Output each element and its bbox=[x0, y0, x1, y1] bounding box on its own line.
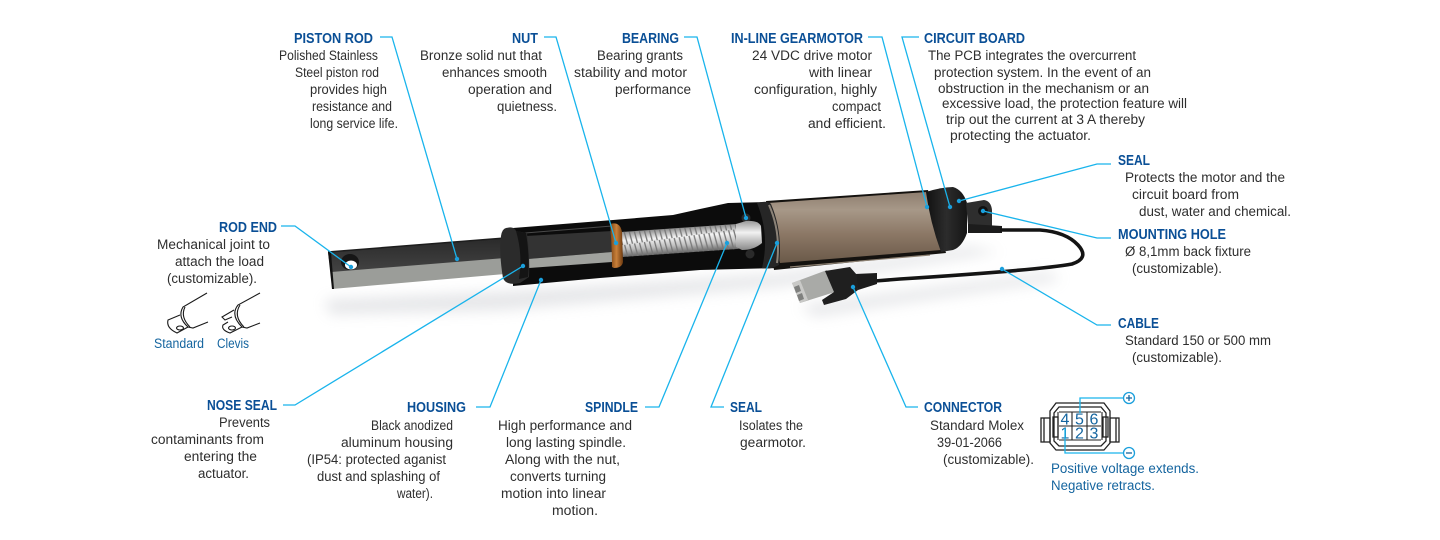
connector label: CONNECTOR bbox=[924, 400, 1002, 416]
rod end label: (customizable). bbox=[167, 271, 257, 286]
nose seal label: NOSE SEAL bbox=[207, 398, 277, 414]
rod end label: attach the load bbox=[175, 254, 264, 269]
rod end label bbox=[157, 220, 353, 286]
housing label bbox=[307, 278, 543, 501]
in-line gearmotor label bbox=[731, 31, 929, 209]
icon: clevis rod end bbox=[217, 293, 260, 351]
housing label: aluminum housing bbox=[341, 435, 453, 450]
bearing label: stability and motor bbox=[574, 65, 688, 80]
pin numbers: 6 bbox=[1090, 412, 1099, 428]
rod end label: Mechanical joint to bbox=[157, 237, 270, 252]
circuit board label: The PCB integrates the overcurrent bbox=[928, 48, 1136, 63]
bearing bbox=[736, 214, 762, 258]
polarity note bbox=[1051, 461, 1199, 493]
motor seal label: SEAL bbox=[730, 400, 762, 416]
housing bbox=[513, 202, 780, 286]
nose seal label: actuator. bbox=[198, 466, 249, 481]
motor seal flange bbox=[757, 202, 780, 269]
nose seal label: contaminants from bbox=[151, 432, 264, 447]
piston rod label: provides high bbox=[310, 82, 387, 97]
spindle label bbox=[498, 241, 729, 518]
piston rod label: Steel piston rod bbox=[295, 65, 379, 80]
motor seal label: Isolates the bbox=[739, 418, 803, 433]
pin numbers: 4 bbox=[1061, 412, 1070, 428]
connector pinout diagram bbox=[1041, 392, 1199, 493]
motor seal label bbox=[711, 241, 806, 450]
polarity note: Negative retracts. bbox=[1051, 478, 1155, 493]
spindle label: High performance and bbox=[498, 418, 632, 433]
motor seal label: gearmotor. bbox=[740, 435, 806, 450]
mounting hole label: (customizable). bbox=[1132, 261, 1222, 276]
cable label bbox=[1000, 267, 1271, 365]
rod end hole bbox=[341, 254, 359, 270]
positive lead bbox=[1080, 392, 1134, 413]
circuit board label: protection system. In the event of an bbox=[934, 65, 1151, 80]
actuator illustration bbox=[325, 187, 1083, 316]
gearmotor body bbox=[768, 192, 941, 263]
mounting ear bbox=[966, 200, 992, 227]
piston rod label: PISTON ROD bbox=[294, 31, 373, 47]
connector outline bbox=[1041, 403, 1119, 450]
in-line gearmotor label: compact bbox=[832, 99, 881, 114]
nut label bbox=[420, 31, 618, 245]
connector label: Standard Molex bbox=[930, 418, 1024, 433]
mounting hole label bbox=[981, 209, 1251, 276]
connector label: 39-01-2066 bbox=[937, 435, 1002, 450]
spindle label: Along with the nut, bbox=[505, 452, 620, 467]
negative lead bbox=[1065, 428, 1134, 458]
bearing label: performance bbox=[615, 82, 691, 97]
nut label: enhances smooth bbox=[442, 65, 547, 80]
circuit board label: trip out the current at 3 A thereby bbox=[946, 112, 1145, 127]
circuit board label bbox=[902, 31, 1187, 209]
bearing label: Bearing grants bbox=[597, 48, 683, 63]
housing label: water). bbox=[396, 486, 433, 501]
nose seal bbox=[500, 227, 529, 284]
top seal label: circuit board from bbox=[1132, 187, 1239, 202]
ground shadow bbox=[325, 247, 1060, 316]
piston rod label: resistance and bbox=[312, 99, 392, 114]
motor frame backing bbox=[766, 190, 946, 270]
nose seal label: Prevents bbox=[219, 415, 270, 430]
in-line gearmotor label: IN-LINE GEARMOTOR bbox=[731, 31, 863, 47]
spindle label: SPINDLE bbox=[585, 400, 638, 416]
circuit board label: protecting the actuator. bbox=[950, 128, 1091, 143]
housing label: HOUSING bbox=[407, 400, 466, 416]
bearing label bbox=[574, 31, 748, 220]
piston rod label: Polished Stainless bbox=[279, 48, 378, 63]
spindle label: motion into linear bbox=[501, 486, 607, 501]
in-line gearmotor label: 24 VDC drive motor bbox=[752, 48, 873, 63]
bearing label: BEARING bbox=[622, 31, 679, 47]
cable bbox=[875, 224, 1083, 281]
top seal label: SEAL bbox=[1118, 153, 1150, 169]
icon: standard rod end: Standard bbox=[154, 336, 204, 351]
top seal label: Protects the motor and the bbox=[1125, 170, 1285, 185]
spindle bbox=[621, 224, 739, 257]
piston rod label bbox=[279, 31, 459, 261]
rod end label: ROD END bbox=[219, 220, 277, 236]
nut label: NUT bbox=[512, 31, 538, 47]
mounting hole label: MOUNTING HOLE bbox=[1118, 227, 1226, 243]
cable label: CABLE bbox=[1118, 316, 1159, 332]
pin numbers: 2 bbox=[1075, 426, 1084, 442]
circuit board label: excessive load, the protection feature will bbox=[942, 96, 1187, 111]
nose seal label: entering the bbox=[184, 449, 257, 464]
piston rod label: long service life. bbox=[310, 116, 398, 131]
top seal label: dust, water and chemical. bbox=[1139, 204, 1291, 219]
housing label: (IP54: protected aganist bbox=[307, 452, 446, 467]
in-line gearmotor label: with linear bbox=[808, 65, 873, 80]
nut label: Bronze solid nut that bbox=[420, 48, 542, 63]
icon: clevis rod end: Clevis bbox=[217, 336, 249, 351]
spindle label: converts turning bbox=[510, 469, 606, 484]
housing label: Black anodized bbox=[371, 418, 453, 433]
nut bbox=[610, 223, 623, 268]
pin numbers: 5 bbox=[1075, 412, 1084, 428]
spindle label: long lasting spindle. bbox=[506, 435, 626, 450]
housing label: dust and splashing of bbox=[317, 469, 440, 484]
mounting hole label: Ø 8,1mm back fixture bbox=[1125, 244, 1251, 259]
polarity note: Positive voltage extends. bbox=[1051, 461, 1199, 476]
nut label: operation and bbox=[468, 82, 552, 97]
piston rod bbox=[328, 238, 505, 289]
pin numbers: 1 bbox=[1061, 426, 1070, 442]
icon: standard rod end bbox=[154, 293, 208, 351]
in-line gearmotor label: and efficient. bbox=[808, 116, 886, 131]
spindle label: motion. bbox=[552, 503, 598, 518]
connector plug bbox=[792, 267, 877, 305]
circuit board label: obstruction in the mechanism or an bbox=[938, 81, 1149, 96]
in-line gearmotor label: configuration, highly bbox=[754, 82, 877, 97]
nose seal label bbox=[151, 264, 525, 481]
circuit board label: CIRCUIT BOARD bbox=[924, 31, 1025, 47]
top seal label bbox=[957, 153, 1291, 219]
connector label: (customizable). bbox=[943, 452, 1034, 467]
pin numbers bbox=[1061, 412, 1099, 442]
cable label: Standard 150 or 500 mm bbox=[1125, 333, 1271, 348]
circuit board cap bbox=[926, 187, 967, 252]
connector label bbox=[851, 285, 1034, 467]
cable label: (customizable). bbox=[1132, 350, 1222, 365]
motor underside highlight bbox=[790, 255, 930, 267]
pin numbers: 3 bbox=[1090, 426, 1099, 442]
nut label: quietness. bbox=[497, 99, 557, 114]
